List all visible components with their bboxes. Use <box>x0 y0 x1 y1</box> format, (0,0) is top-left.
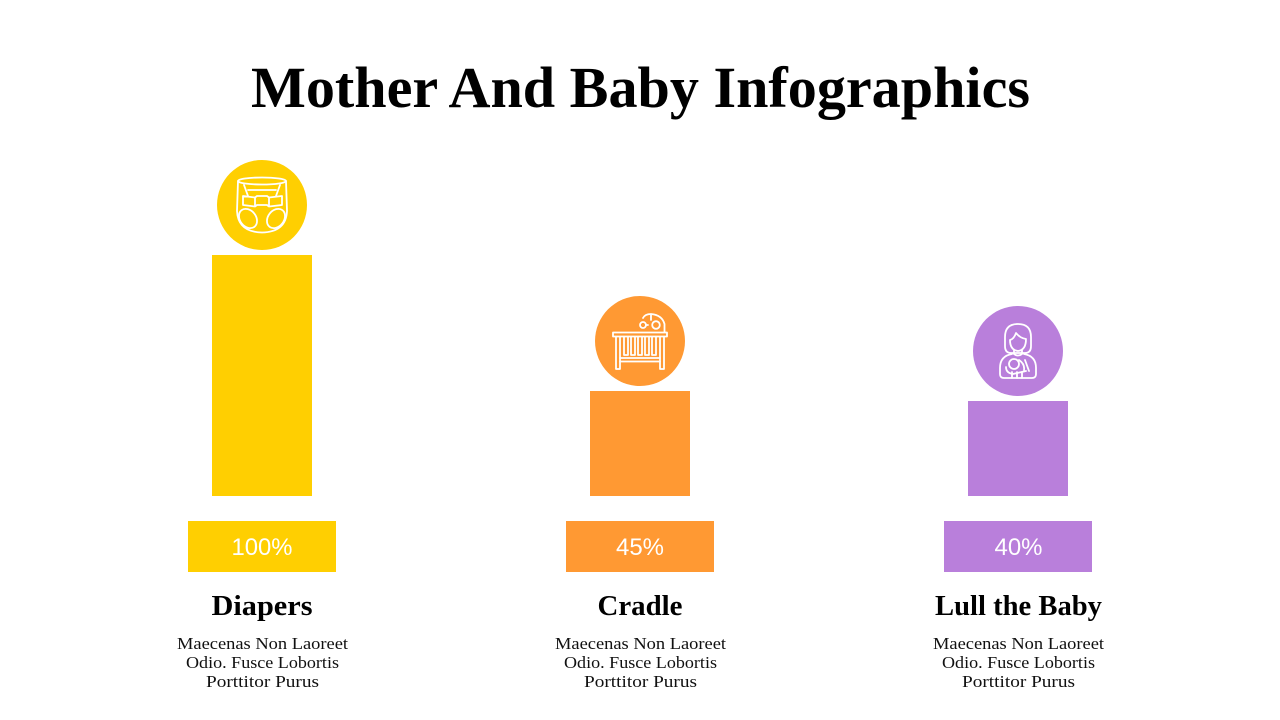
text block: diapers: Odio. Fusce Lobortis <box>186 653 339 672</box>
text block: lull the baby: Odio. Fusce Lobortis <box>942 653 1095 672</box>
percent box: 45% <box>566 521 714 572</box>
bar: diapers <box>212 255 312 496</box>
percent box: 45%: 45% <box>616 534 664 561</box>
text block: cradle: Maecenas Non Laoreet <box>555 634 726 653</box>
text block: lull the baby: Maecenas Non Laoreet <box>933 634 1104 653</box>
panel: diapers <box>177 160 348 691</box>
text block: lull the baby: Porttitor Purus <box>962 672 1075 691</box>
percent box: 40%: 40% <box>994 534 1042 561</box>
title: Mother And Baby Infographics <box>251 55 1030 120</box>
panel: lull the baby <box>933 306 1104 691</box>
bar: lull the baby <box>968 401 1068 496</box>
text block: cradle: Odio. Fusce Lobortis <box>564 653 717 672</box>
text block: lull the baby <box>933 634 1104 691</box>
text block: diapers: Porttitor Purus <box>206 672 319 691</box>
heading: Lull the Baby: Lull the Baby <box>935 590 1102 622</box>
icon: cradle <box>595 296 685 386</box>
percent box: 40% <box>944 521 1092 572</box>
percent box: 100%: 100% <box>232 534 292 561</box>
panel: cradle <box>555 296 726 691</box>
text block: diapers: Maecenas Non Laoreet <box>177 634 348 653</box>
icon: mother and baby <box>973 306 1063 396</box>
text block: cradle <box>555 634 726 691</box>
text block: cradle: Porttitor Purus <box>584 672 697 691</box>
icon: diaper <box>217 160 307 250</box>
percent box: 100% <box>188 521 336 572</box>
heading: Diapers: Diapers <box>212 590 312 622</box>
text block: diapers <box>177 634 348 691</box>
heading: Cradle: Cradle <box>598 590 683 622</box>
bar: cradle <box>590 391 690 496</box>
